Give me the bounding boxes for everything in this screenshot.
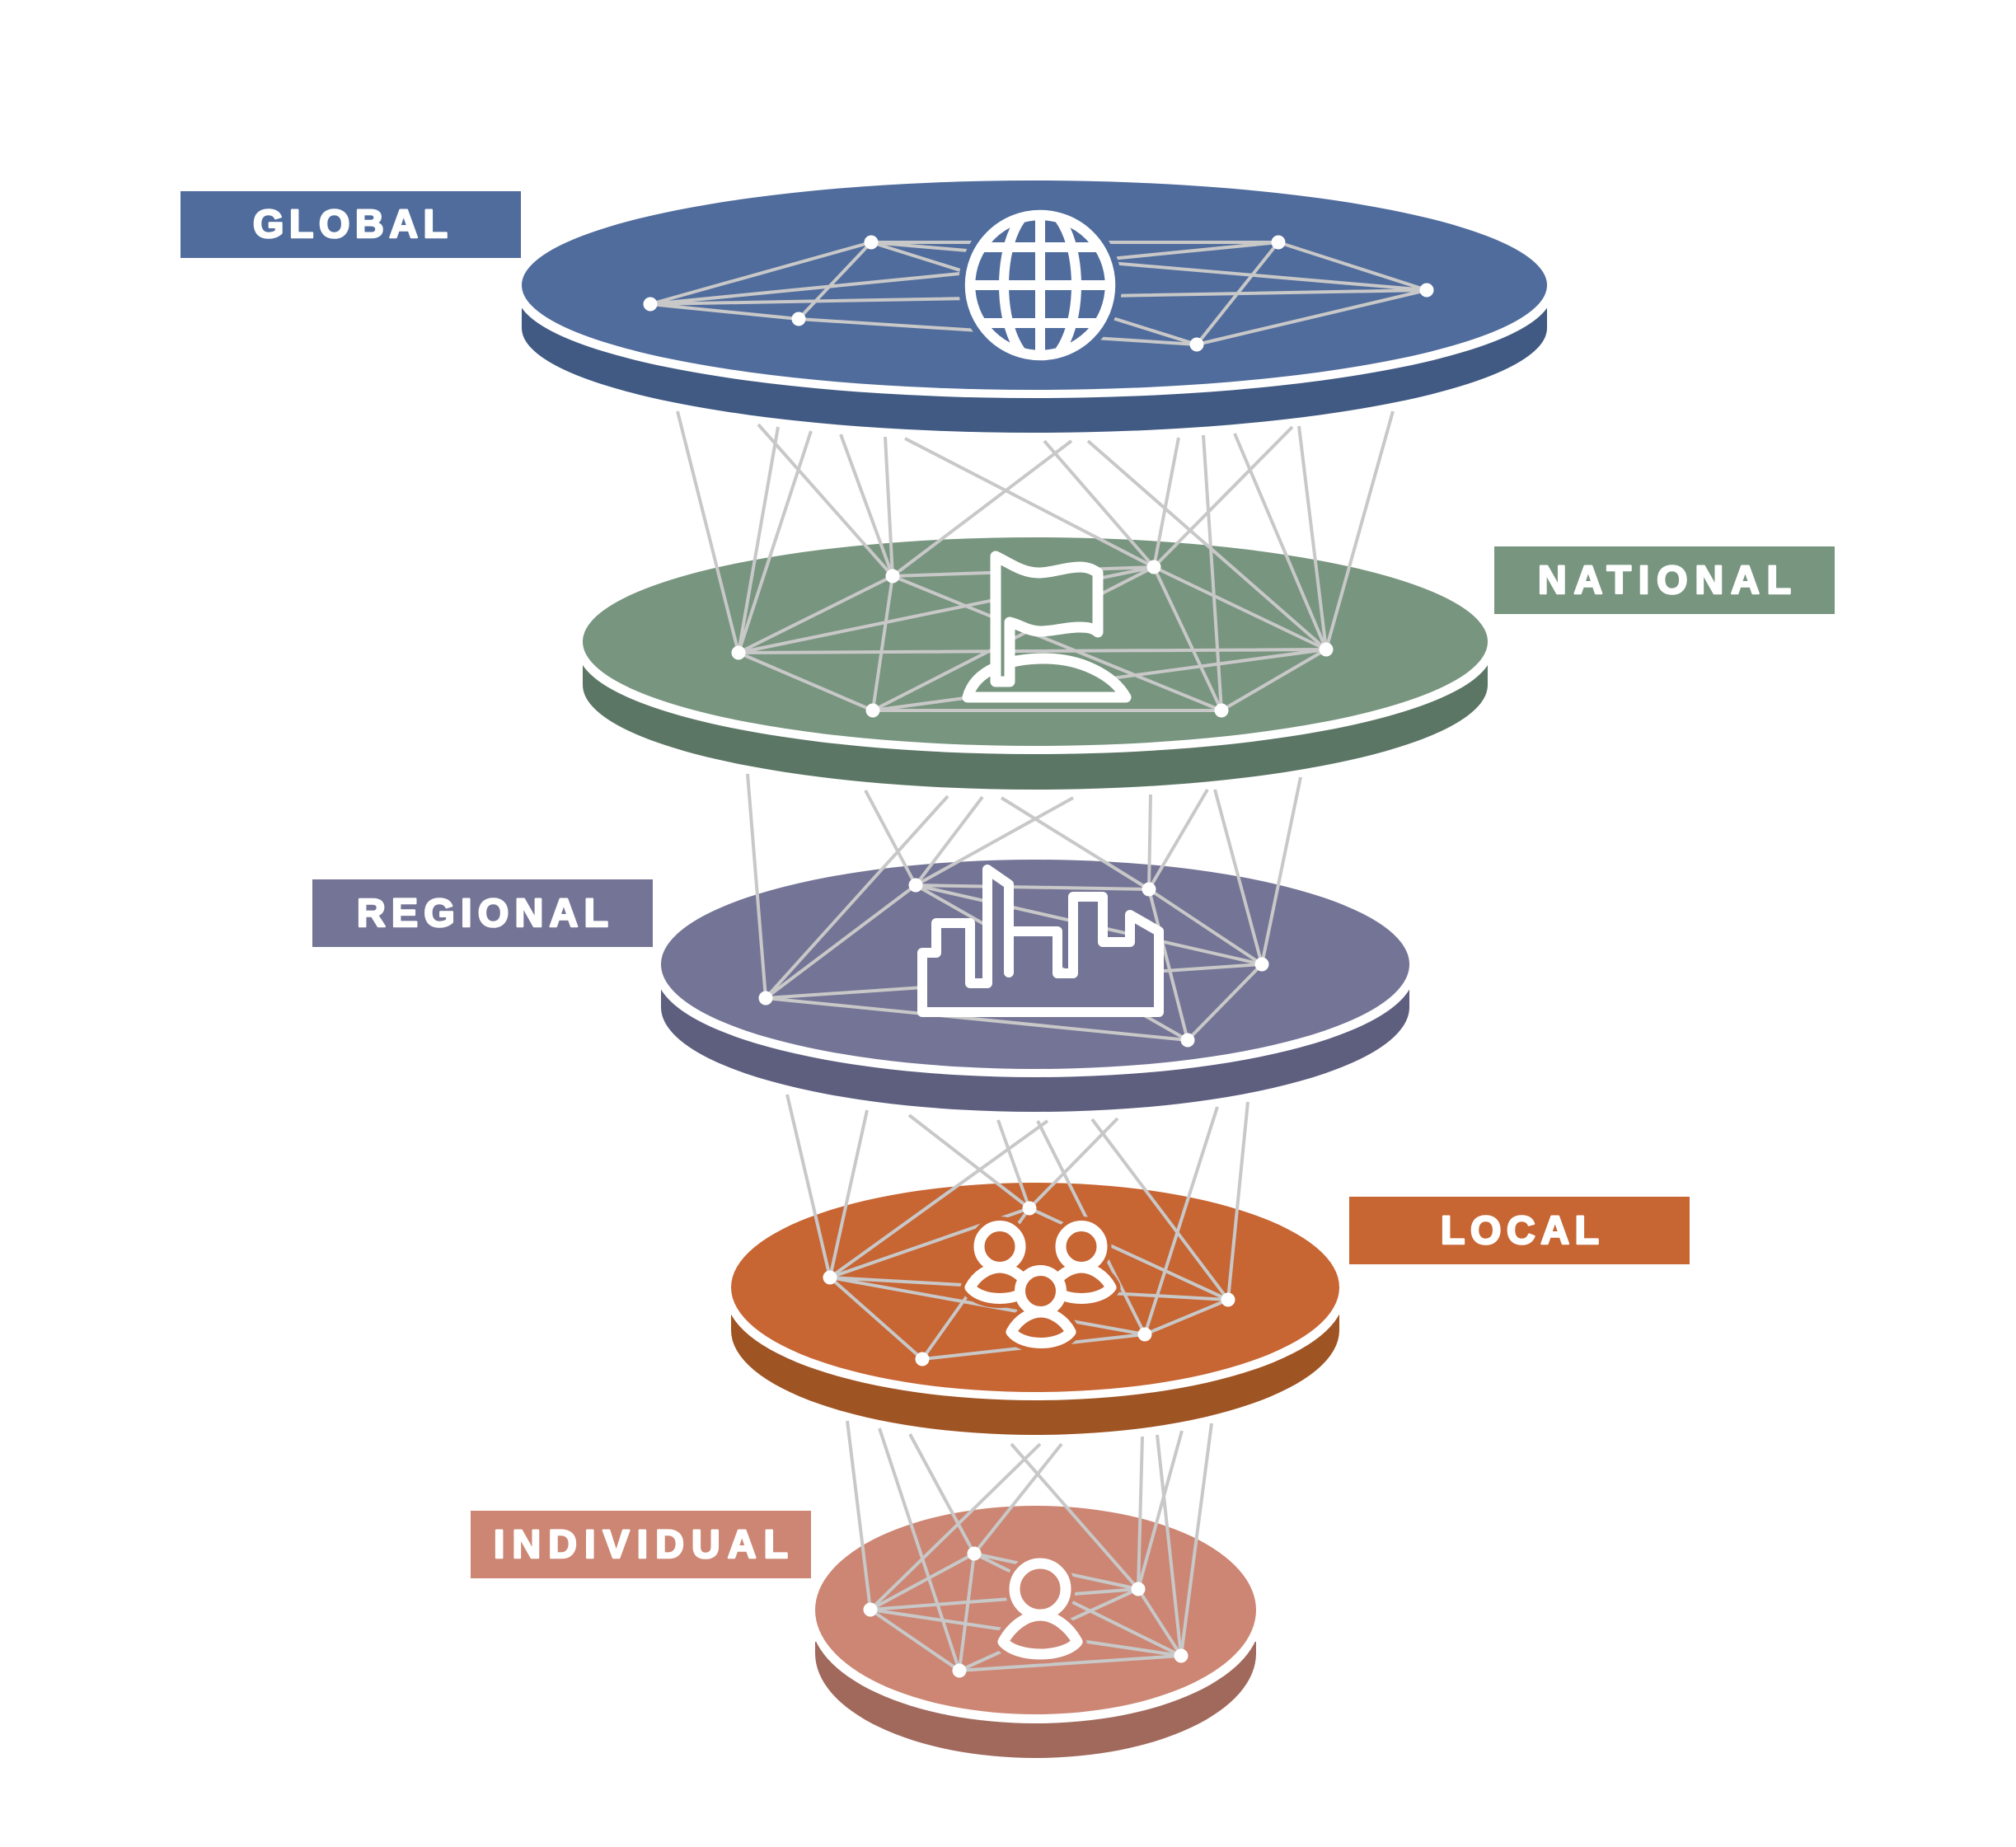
icon: flag on hill [968, 556, 1126, 697]
network nodes: global [643, 236, 1434, 351]
label: regional [312, 879, 653, 947]
icon: group of three people [970, 1226, 1111, 1343]
network nodes: regional [758, 879, 1269, 1047]
disc: national [578, 537, 1493, 790]
connections: national to regional [748, 774, 1301, 998]
label: local [1349, 1197, 1690, 1264]
label: national [1494, 546, 1835, 614]
panel: individual level [471, 1421, 1261, 1758]
icon: person [1003, 1563, 1077, 1654]
connections: regional to local [787, 1095, 1248, 1334]
connections: local to individual [847, 1421, 1212, 1671]
network lines: national disc [738, 567, 1326, 710]
connections: global to national [677, 411, 1393, 710]
panel: national level [578, 411, 1835, 790]
network nodes: local [823, 1202, 1235, 1366]
disc: global [517, 180, 1552, 433]
icon: factory [922, 870, 1159, 1012]
network lines: individual disc [870, 1554, 1181, 1671]
disc: local [726, 1183, 1344, 1435]
label: global: GLOBAL [253, 203, 448, 246]
label: individual: INDIVIDUAL [494, 1523, 788, 1567]
panel: local level [726, 1095, 1690, 1435]
panel: regional level [312, 774, 1414, 1112]
label: individual [471, 1511, 811, 1578]
network lines: local disc [830, 1208, 1228, 1359]
network nodes: individual [864, 1546, 1189, 1678]
panel: global level [181, 180, 1552, 433]
disc: individual [811, 1506, 1261, 1758]
label: local: LOCAL [1441, 1209, 1599, 1253]
label: global [181, 191, 521, 258]
network lines: regional disc [766, 885, 1262, 1040]
icon: globe [959, 204, 1122, 367]
disc: regional [656, 860, 1414, 1112]
network lines: global disc [650, 242, 1427, 345]
network nodes: national [732, 560, 1334, 717]
label: national: NATIONAL [1538, 559, 1791, 602]
infographic: nested levels funnel [181, 180, 1835, 1758]
label: regional: REGIONAL [357, 892, 608, 935]
